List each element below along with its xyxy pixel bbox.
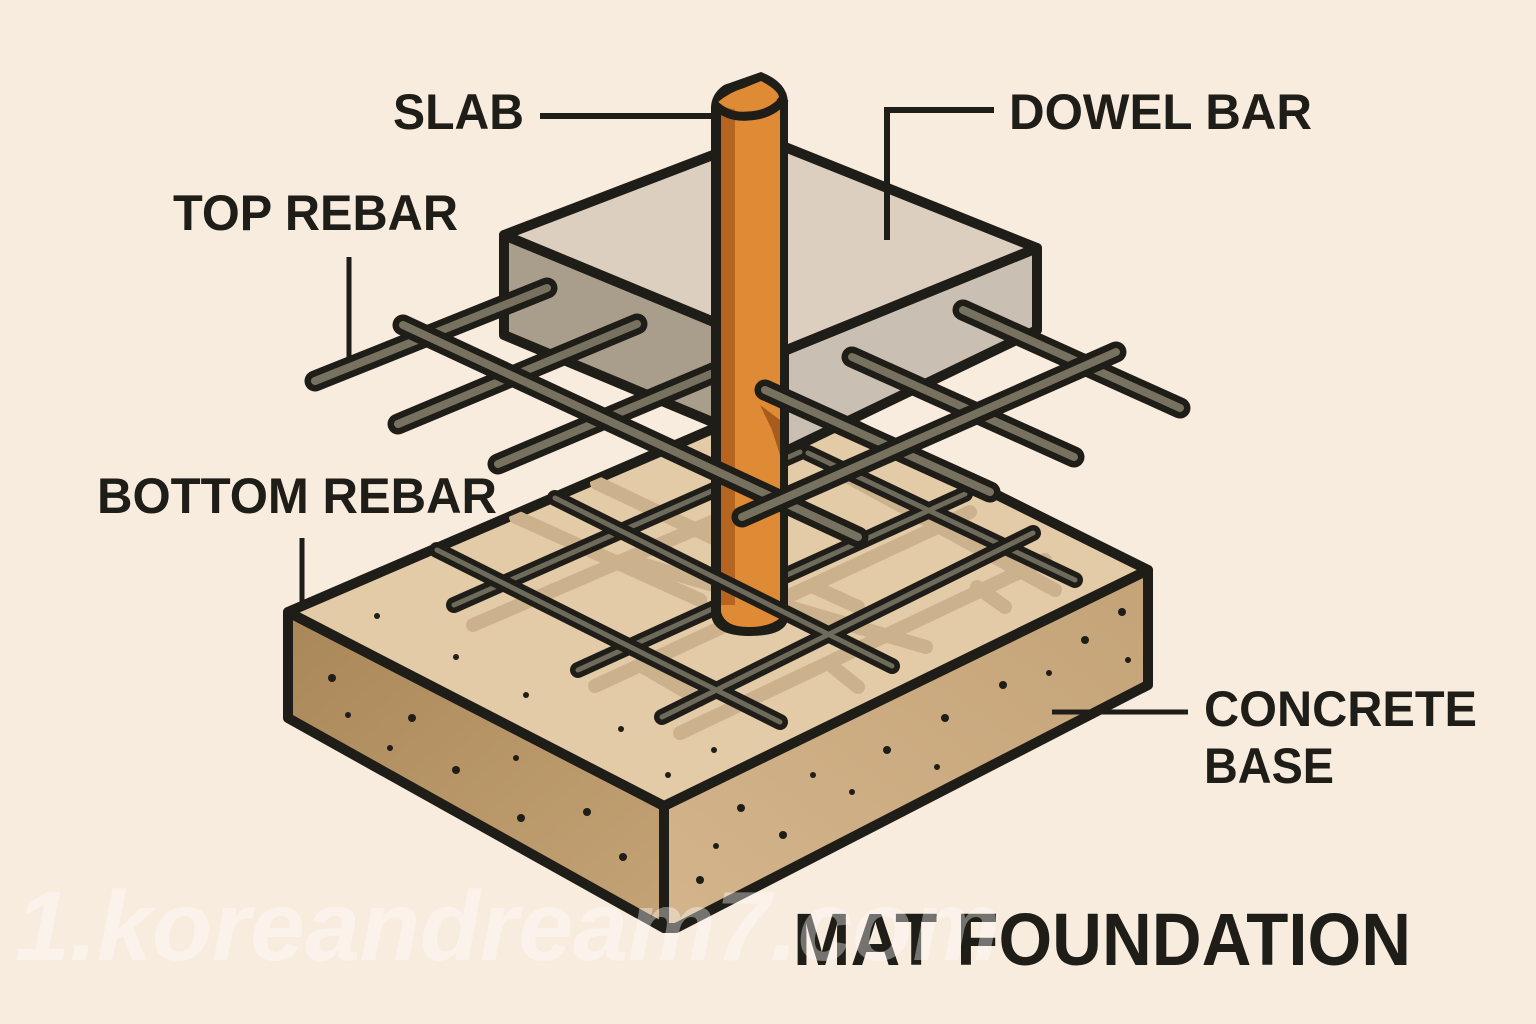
label: concrete base (1052, 681, 1477, 794)
base speckle dots (328, 608, 1131, 884)
label: top rebar: TOP REBAR (173, 185, 458, 241)
label: dowel bar: DOWEL BAR (1009, 84, 1312, 140)
label: concrete base: CONCRETE (1204, 681, 1477, 737)
concrete base (288, 394, 1148, 928)
dowel bar (711, 72, 788, 636)
slab (504, 137, 1037, 452)
label: slab: SLAB (393, 84, 524, 140)
rebar shadows on base (473, 475, 1055, 733)
bottom rebar grid in front of dowel (437, 498, 1033, 722)
rebar grid behind dowel (454, 452, 1075, 670)
label: concrete base: BASE (1204, 738, 1334, 794)
label: dowel bar (887, 84, 1312, 240)
top rebar grid (315, 288, 1180, 537)
top rebar bars behind dowel (498, 368, 725, 464)
label: bottom rebar: BOTTOM REBAR (97, 468, 497, 524)
watermark: 1.koreandream7.com (15, 871, 1000, 981)
title: MAT FOUNDATION (793, 898, 1411, 981)
